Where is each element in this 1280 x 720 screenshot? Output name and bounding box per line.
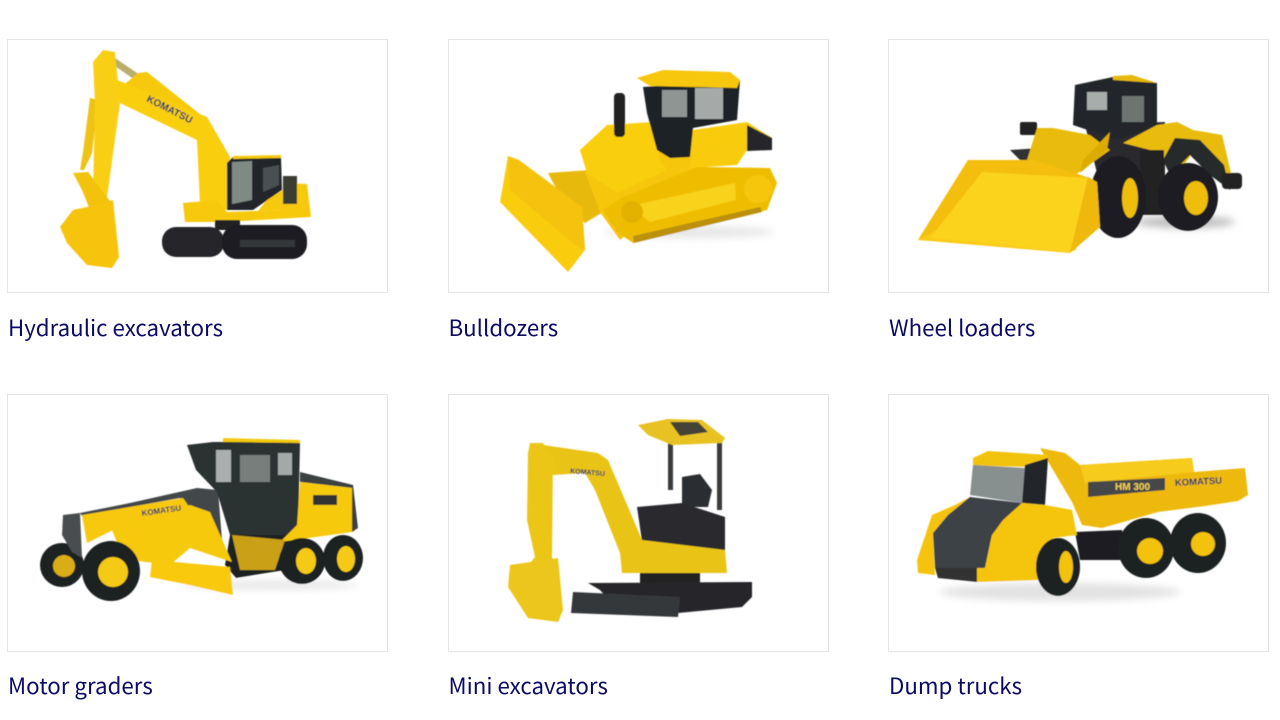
label: hydraulic excavators: Hydraulic excavators <box>8 311 223 343</box>
icon: mini excavator: KOMATSU <box>570 468 605 478</box>
label: mini excavators: Mini excavators <box>448 669 608 701</box>
panel: wheel loaders <box>888 39 1269 293</box>
panel: motor graders <box>7 394 388 652</box>
icon: mini excavator <box>508 419 752 622</box>
label: dump trucks: Dump trucks <box>889 669 1022 701</box>
icon: motor grader <box>40 438 363 601</box>
label: wheel loaders: Wheel loaders <box>889 311 1035 343</box>
panel: dump trucks <box>888 394 1269 652</box>
icon: hydraulic excavator <box>60 50 311 268</box>
panel: mini excavators <box>448 394 829 652</box>
label: bulldozers: Bulldozers <box>448 311 558 343</box>
panel: hydraulic excavators <box>7 39 388 293</box>
label: motor graders: Motor graders <box>8 669 153 701</box>
icon: wheel loader <box>918 75 1242 253</box>
icon: dump truck <box>917 448 1248 601</box>
icon: bulldozer <box>500 70 777 272</box>
icon: dump truck: KOMATSU <box>1175 476 1223 489</box>
icon: hydraulic excavator: KOMATSU <box>145 94 194 126</box>
icon: dump truck: HM 300 <box>1115 482 1150 493</box>
icon: motor grader: KOMATSU <box>141 503 182 518</box>
panel: bulldozers <box>448 39 829 293</box>
